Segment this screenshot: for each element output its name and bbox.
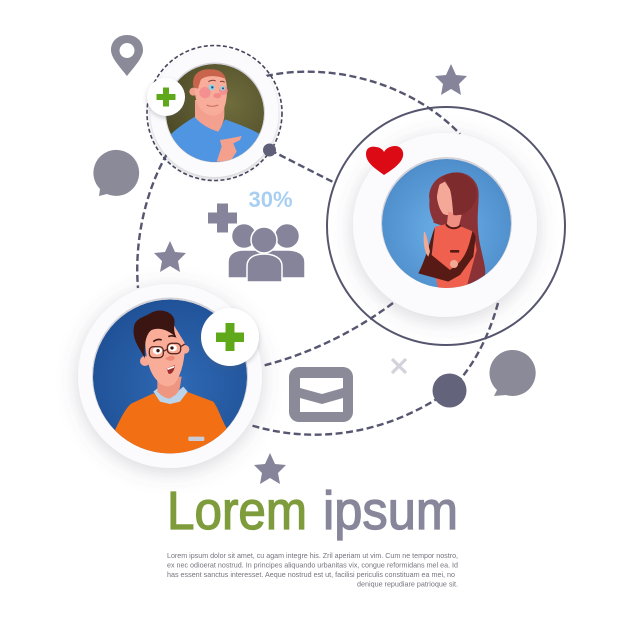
connector node xyxy=(263,144,276,156)
body text: ex nec odioerat nostrud. In principes aliquando urbanitas vix, congue reformidans mel ea. Id xyxy=(167,560,458,570)
title xyxy=(167,481,458,541)
portrait rim xyxy=(92,298,248,454)
panel: right profile xyxy=(327,107,565,345)
icon: close mark xyxy=(392,359,406,373)
white disc xyxy=(150,49,278,177)
panel: top profile xyxy=(147,46,282,180)
panel: left profile xyxy=(78,284,262,468)
body text: has essent sanctus interesset. Aeque nostrud est ut, facilisi periculis constituam ea mei, no xyxy=(167,570,455,579)
body text: denique repudiare patrioque sit. xyxy=(357,580,458,588)
outer ring xyxy=(327,107,565,345)
plus badge xyxy=(147,78,185,116)
icon: map pin xyxy=(111,35,143,76)
white disc xyxy=(353,133,537,317)
icon: group of people xyxy=(228,224,305,282)
icon: envelope xyxy=(289,367,353,422)
icon: plus xyxy=(208,204,237,232)
portrait: man with glasses xyxy=(93,300,247,460)
portrait rim xyxy=(165,62,265,162)
title word: ipsum: ipsum xyxy=(323,481,458,541)
icon: star top right xyxy=(435,64,467,95)
body text: Lorem ipsum dolor sit amet, cu agam integre his. Zril aperiam ut vim. Cum ne tempor nostro, xyxy=(167,551,458,560)
icon: star bottom xyxy=(254,453,286,484)
heart icon xyxy=(366,146,403,175)
portrait: man in blue shirt xyxy=(166,64,264,170)
icon: chat bubble left xyxy=(93,150,139,196)
infographic canvas xyxy=(70,35,566,588)
dashed connector lines xyxy=(137,72,498,435)
icon: chat bubble right xyxy=(489,350,536,396)
portrait: woman with long hair xyxy=(382,159,511,290)
statistic: 30%: 30% xyxy=(248,187,293,212)
connector node large xyxy=(432,374,466,408)
icon: star left xyxy=(154,241,186,272)
body text xyxy=(167,551,458,588)
white disc xyxy=(78,284,262,468)
portrait rim xyxy=(381,157,512,288)
plus badge xyxy=(201,308,259,366)
title word: Lorem: Lorem xyxy=(167,481,307,541)
dashed ring xyxy=(147,46,282,180)
